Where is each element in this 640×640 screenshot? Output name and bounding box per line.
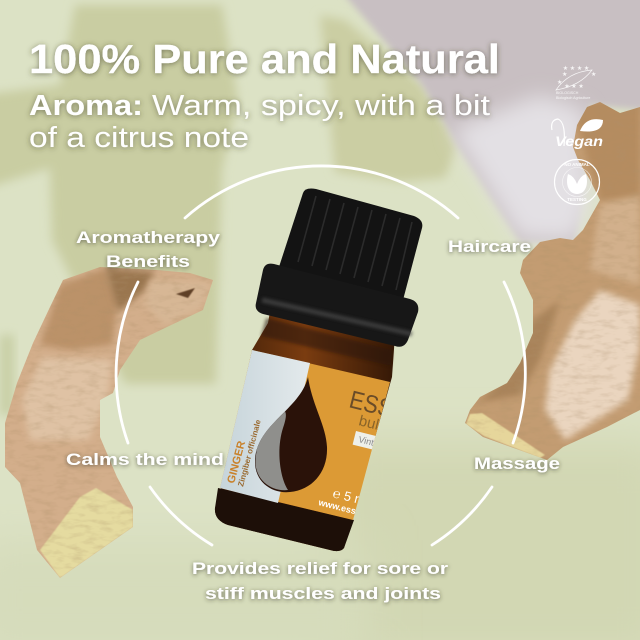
icon: organic stars badge: ★ (591, 71, 596, 78)
label: massage: Massage (474, 454, 560, 473)
label: provides relief: stiff muscles and joints (205, 584, 441, 603)
drop (255, 377, 327, 492)
right ginger root (460, 100, 640, 465)
cap (278, 188, 422, 300)
icon: no animal testing badge: TESTING (567, 197, 587, 202)
label: provides relief (192, 559, 448, 603)
label text: GINGER (225, 440, 248, 485)
icon: organic stars badge: ★ ★ ★ ★ (563, 65, 589, 72)
circle arcs (116, 166, 525, 545)
label: haircare: Haircare (448, 237, 531, 256)
icon: organic stars badge (556, 65, 596, 100)
label text: ESSE (347, 386, 410, 427)
icon: no animal testing badge: NO ANIMAL (564, 162, 590, 167)
subtitle: of a citrus note (29, 122, 249, 154)
label text (228, 390, 386, 514)
label text: www.essentialbulk (317, 497, 399, 527)
ginger dark skin (40, 268, 118, 350)
left ginger root (0, 260, 220, 580)
label: provides relief: Provides relief for sore or (192, 559, 448, 578)
label: calms the mind: Calms the mind (66, 450, 224, 469)
label text: Zingiber officinale (236, 418, 263, 488)
collar (256, 264, 418, 347)
ginger cut edge (466, 413, 545, 458)
bottle (215, 188, 422, 551)
icon: organic stars badge: BIOLOGISCH (556, 91, 579, 95)
label text: ℮ 5 ml (331, 485, 370, 509)
label: aromatherapy benefits: Aromatherapy (76, 228, 221, 247)
icon: no animal testing badge (554, 160, 600, 204)
label (220, 350, 390, 520)
icon: organic stars badge: Biologisch Agriculture (556, 96, 590, 100)
ginger upper skin (577, 102, 640, 200)
label: aromatherapy benefits (76, 228, 221, 271)
ginger dark skin (483, 303, 558, 402)
ginger pale flesh (22, 358, 112, 440)
label text: Vintage (358, 434, 389, 451)
icon: organic stars badge: ★ (557, 79, 562, 86)
ginger pale flesh (545, 290, 640, 440)
ginger cut face (40, 488, 133, 578)
glass body (215, 300, 395, 551)
icon: vegan badge (552, 119, 603, 149)
subtitle: Warm, spicy, with a bit (152, 90, 490, 122)
icon: vegan badge: Vegan (555, 133, 603, 149)
subtitle: Aroma: (29, 90, 143, 122)
title: 100% Pure and Natural (29, 36, 500, 82)
label text: bulk (357, 412, 388, 436)
icon: organic stars badge: ★ (562, 71, 567, 78)
label: aromatherapy benefits: Benefits (106, 252, 190, 271)
icon: organic stars badge: ★ ★ ★ (564, 83, 584, 90)
subtitle (29, 90, 490, 154)
